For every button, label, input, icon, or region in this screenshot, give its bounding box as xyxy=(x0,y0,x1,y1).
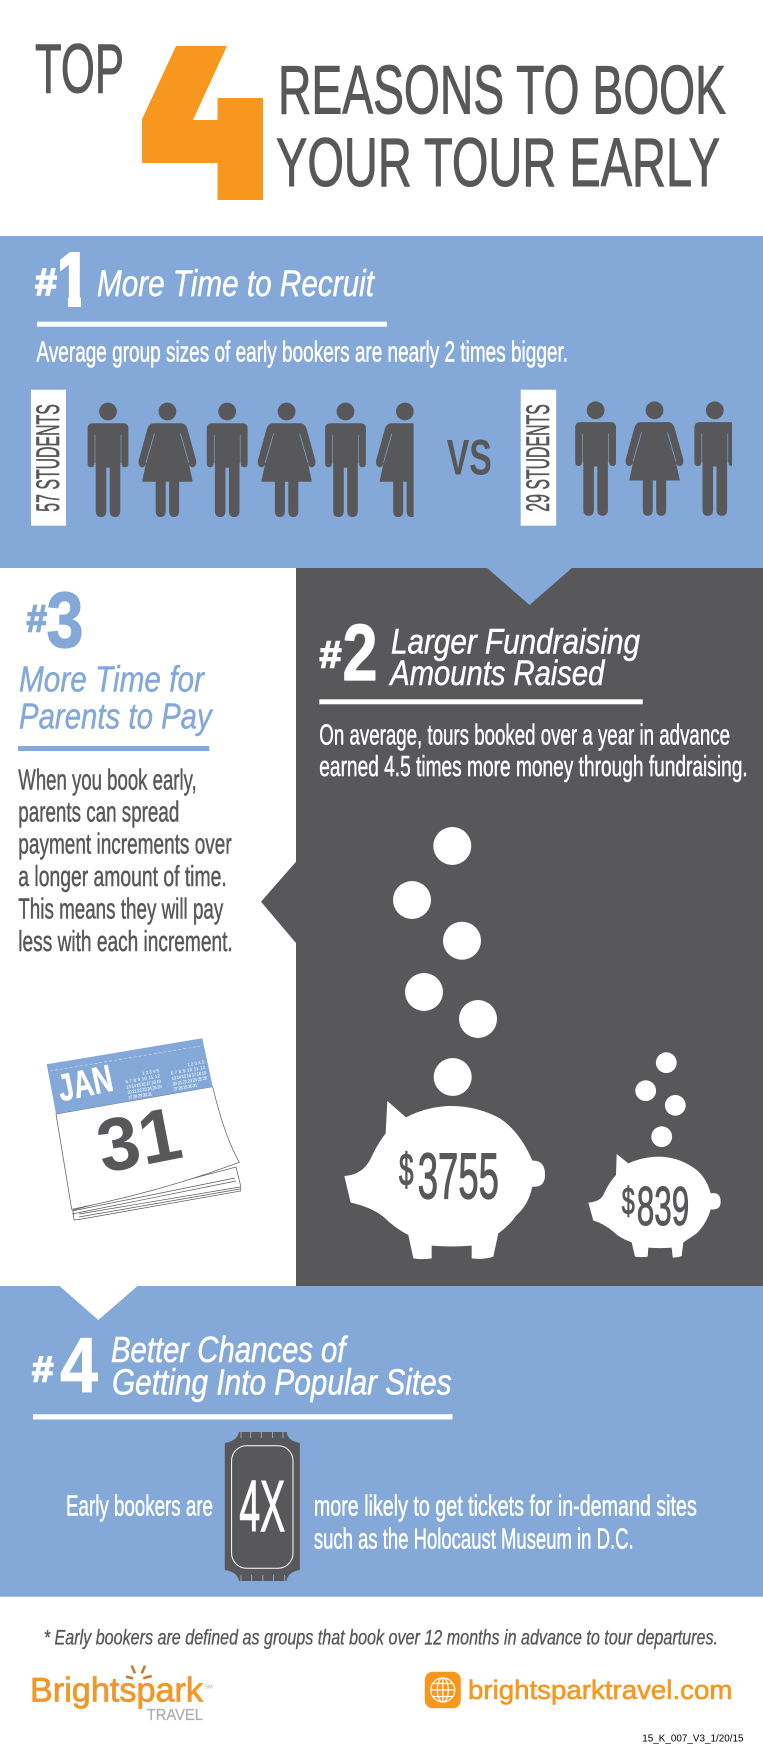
text: payment explanation: When you book early, xyxy=(18,764,197,796)
text: payment explanation: less with each increment. xyxy=(18,926,233,958)
logo wordmark: Brightspark xyxy=(30,1672,204,1710)
mini month grid right: 1 2 3 4 5 xyxy=(187,1059,205,1067)
value: $839: 839 xyxy=(637,1175,689,1237)
text: payment explanation: a longer amount of time. xyxy=(18,861,227,893)
icon: large stack of coins xyxy=(393,827,497,1096)
mini month grid right: 20 21 22 23 24 25 26 xyxy=(172,1075,208,1086)
heading number #2: 2 xyxy=(342,608,378,697)
heading: More Time for Parents to Pay: Parents to Pay xyxy=(19,695,213,736)
arrow notch from section 3 xyxy=(58,1285,139,1320)
mini month grid right xyxy=(169,1059,209,1092)
heading: Better Chances of Getting Into Popular Sites: Getting Into Popular Sites xyxy=(112,1361,452,1402)
mini month grid left: 6 7 8 9 10 11 12 xyxy=(125,1073,161,1084)
icon: small stack of coins xyxy=(635,1052,686,1147)
logo: Brightspark Travel xyxy=(30,1666,213,1724)
ticket value: 4X: 4X xyxy=(239,1467,285,1547)
mini month grid right: 13 14 15 16 17 18 19 xyxy=(171,1070,207,1081)
heading: Better Chances of Getting Into Popular Sites xyxy=(111,1329,452,1402)
heading number #4: 4 xyxy=(60,1321,98,1409)
text: payment explanation: This means they will pay xyxy=(18,893,224,925)
text: early bookers are: Early bookers are xyxy=(66,1491,213,1523)
heading: More Time to Recruit: More Time to Recruit xyxy=(97,263,375,304)
panel: #3 more time for parents to pay xyxy=(18,575,241,1220)
icons: six students xyxy=(88,403,434,517)
label: 29 students xyxy=(520,390,556,526)
heading number #3: 3 xyxy=(46,575,84,664)
panel: #1 more time to recruit xyxy=(0,236,763,568)
job code: 15_K_007_V3_1/20/15 xyxy=(642,1734,744,1745)
panel: #2 larger fundraising xyxy=(261,567,763,1287)
heading number #1 xyxy=(34,252,81,307)
icon: ticket with 4X xyxy=(225,1432,300,1581)
heading number #3: # xyxy=(26,599,47,641)
mini month grid right: 27 28 29 30 31 xyxy=(173,1082,198,1092)
website address: brightsparktravel.com xyxy=(468,1675,732,1705)
heading number #1: 1 xyxy=(55,236,91,324)
heading number #1: # xyxy=(35,262,57,304)
calendar month: JAN: JAN xyxy=(54,1058,117,1110)
icons: three students xyxy=(575,401,735,516)
heading: More Time for Parents to Pay: More Time for xyxy=(19,659,206,700)
title xyxy=(35,30,726,201)
heading: Larger Fundraising Amounts Raised xyxy=(389,622,640,693)
value: $3755: 3755 xyxy=(418,1139,499,1212)
text: payment explanation xyxy=(18,764,233,958)
service mark: SM xyxy=(204,1684,213,1690)
heading number #2 xyxy=(320,608,378,697)
text: fundraising statistic xyxy=(319,719,748,783)
heading number #2: # xyxy=(320,635,342,677)
heading number #3 xyxy=(26,575,84,664)
heading number #4 xyxy=(32,1321,98,1409)
title word: TOP: TOP xyxy=(35,30,124,108)
label: 57 students: 57 STUDENTS xyxy=(30,404,66,512)
icon: small piggy bank xyxy=(588,1154,721,1257)
logo spark rays xyxy=(126,1666,152,1678)
mini month grid left: 20 21 22 23 24 25 26 xyxy=(127,1084,163,1095)
calendar date: 31: 31 xyxy=(90,1090,188,1189)
mini month grid right: 6 7 8 9 10 11 12 xyxy=(170,1065,206,1076)
text: payment explanation: payment increments over xyxy=(18,828,232,860)
logo subtitle: TRAVEL xyxy=(147,1707,203,1724)
heading: Larger Fundraising Amounts Raised: Amounts Raised xyxy=(389,654,606,693)
heading: More Time for Parents to Pay xyxy=(19,659,213,736)
heading: Better Chances of Getting Into Popular Sites: Better Chances of xyxy=(111,1329,349,1370)
text: more likely to get tickets xyxy=(314,1491,697,1555)
big orange number 4 xyxy=(142,46,263,200)
text: payment explanation: parents can spread xyxy=(18,797,179,829)
value: $839: $ xyxy=(622,1181,635,1223)
website link xyxy=(425,1672,732,1708)
icon: tear-off calendar xyxy=(47,1038,241,1220)
mini month grid left: 1 2 3 4 5 xyxy=(142,1068,160,1076)
heading: Larger Fundraising Amounts Raised: Larger Fundraising xyxy=(391,622,640,661)
text: VS: VS xyxy=(447,429,492,485)
mini month grid left: 13 14 15 16 17 18 19 xyxy=(126,1079,162,1090)
value: $3755 xyxy=(399,1139,499,1212)
icon: globe xyxy=(425,1672,461,1708)
arrow notch from section 1 xyxy=(486,567,573,605)
mini month grid left: 27 28 29 30 31 xyxy=(128,1091,153,1100)
label: 29 students: 29 STUDENTS xyxy=(520,404,556,512)
panel: #4 better chances xyxy=(0,1285,763,1597)
value: $3755: $ xyxy=(399,1144,414,1195)
icon: large piggy bank xyxy=(344,1101,545,1259)
value: $839 xyxy=(622,1175,689,1237)
label: 57 students xyxy=(30,390,66,526)
mini month grid left xyxy=(124,1068,164,1100)
heading number #4: # xyxy=(32,1349,54,1390)
